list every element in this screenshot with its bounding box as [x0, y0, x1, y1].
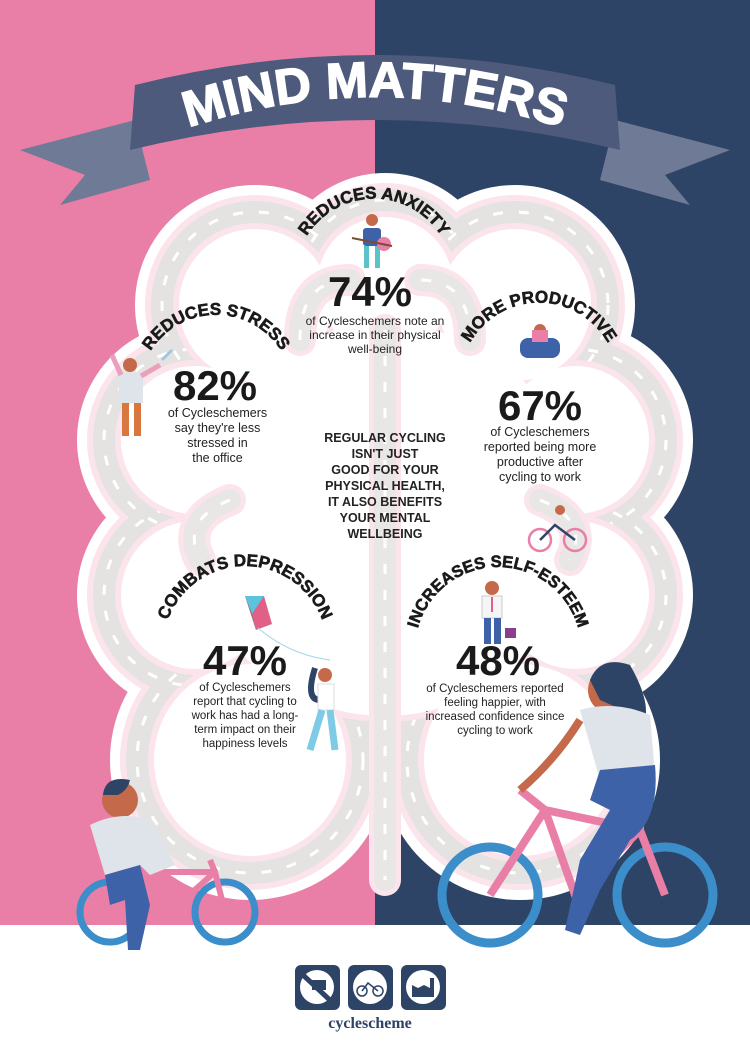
logo: cyclescheme [328, 1015, 412, 1032]
figure: stress person [112, 350, 172, 436]
text: reported being more [484, 440, 596, 454]
stat: depression: 47% [203, 637, 287, 684]
headings arcs: REDUCES STRESS [141, 302, 290, 350]
stat: stress: 82% [173, 362, 257, 409]
figure: laptop [520, 324, 560, 358]
text: the office [192, 451, 243, 465]
headings arcs: INCREASES SELF-ESTEEM [406, 555, 589, 628]
center message: GOOD FOR YOUR [331, 463, 439, 477]
center message: REGULAR CYCLING [324, 431, 446, 445]
text: increase in their physical [309, 328, 441, 342]
text: term impact on their [194, 724, 296, 736]
text: stressed in [187, 436, 248, 450]
big cyclist left [80, 779, 255, 950]
text: of Cycleschemers note an [306, 314, 444, 328]
center message: WELLBEING [348, 527, 422, 541]
text: cycling to work [499, 470, 581, 484]
figure: small cyclist [529, 505, 586, 551]
banner [20, 55, 730, 205]
center message: YOUR MENTAL [340, 511, 430, 525]
headings arcs: COMBATS DEPRESSION [158, 554, 334, 620]
text: say they're less [175, 421, 260, 435]
text: cycling to work [457, 725, 533, 737]
headings arcs [141, 186, 618, 628]
figure: guitarist [352, 214, 392, 268]
big cyclist right [442, 662, 713, 943]
figure: businessman [482, 581, 516, 644]
center message: IT ALSO BENEFITS [328, 495, 442, 509]
stat: productive: 67% [498, 382, 582, 429]
figure: kite and girl [245, 596, 335, 750]
inner roads [194, 280, 576, 880]
text: well-being [348, 342, 402, 356]
logo [295, 965, 446, 1032]
text: of Cycleschemers [490, 425, 590, 439]
text: happiness levels [202, 738, 288, 750]
text: work has had a long- [192, 710, 298, 722]
text: report that cycling to [193, 696, 297, 708]
center message: PHYSICAL HEALTH, [325, 479, 445, 493]
brain shape [77, 173, 693, 900]
headings arcs: MORE PRODUCTIVE [460, 290, 618, 343]
center message [324, 431, 446, 541]
stat: anxiety: 74% [328, 268, 412, 315]
text: feeling happier, with [444, 697, 546, 709]
text: increased confidence since [426, 711, 564, 723]
stat: self-esteem: 48% [456, 637, 540, 684]
text: productive after [497, 455, 583, 469]
banner: MIND MATTERS [181, 62, 568, 128]
text: of Cycleschemers [199, 682, 291, 694]
headings arcs: REDUCES ANXIETY [297, 186, 452, 236]
center message: ISN'T JUST [352, 447, 418, 461]
text: of Cycleschemers reported [426, 683, 564, 695]
text: of Cycleschemers [168, 406, 267, 420]
